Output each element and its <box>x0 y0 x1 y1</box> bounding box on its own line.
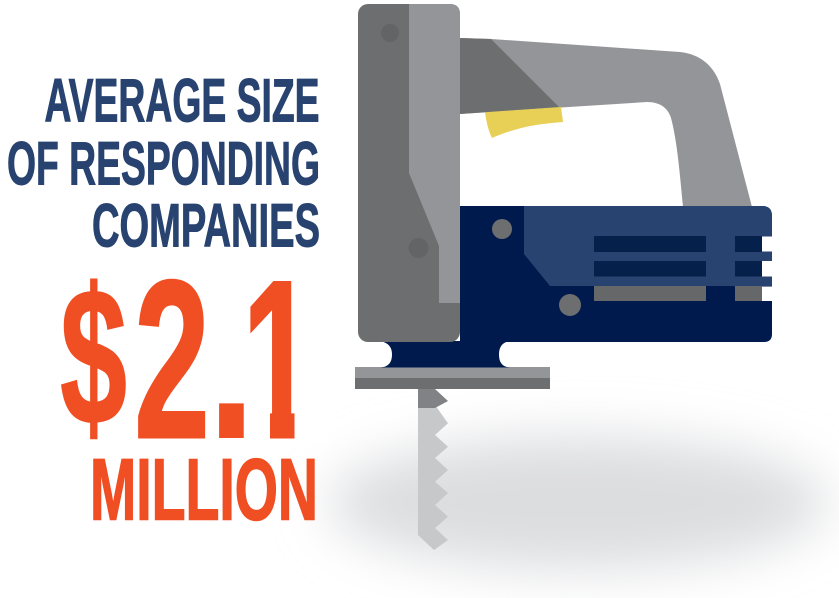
figure: $2.1 million: . <box>208 232 255 486</box>
handle <box>460 38 752 207</box>
motor body navy <box>460 206 772 342</box>
shadow under jigsaw <box>328 437 828 569</box>
front housing highlight <box>409 4 460 303</box>
heading: average size of responding companies: COMPANIES <box>92 192 320 260</box>
trigger <box>485 107 563 138</box>
figure: $2.1 million <box>60 232 326 538</box>
figure: $2.1 million: $ <box>60 248 127 466</box>
icon: jigsaw <box>355 4 772 550</box>
figure: $2.1 million: 2 <box>134 232 210 486</box>
figure: $2.1 million: 1 <box>242 232 315 486</box>
heading: average size of responding companies <box>7 66 320 260</box>
jigsaw blade <box>418 389 448 550</box>
vent slots <box>594 236 772 301</box>
heading: average size of responding companies: AVERAGE SIZE <box>44 66 320 134</box>
motor neck <box>378 341 511 368</box>
base plate <box>355 367 550 389</box>
motor cover blue <box>524 206 772 286</box>
front housing <box>358 4 460 342</box>
body screws <box>492 219 581 316</box>
heading: average size of responding companies: OF RESPONDING <box>7 130 320 198</box>
handle shaded part <box>460 38 559 114</box>
figure: $2.1 million: MILLION <box>90 442 318 538</box>
housing screws <box>381 24 428 258</box>
